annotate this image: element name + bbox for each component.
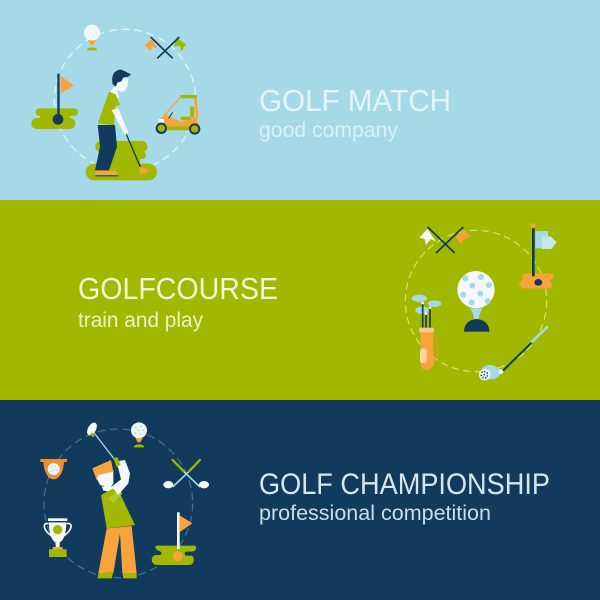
heading: golfcourse: GOLFCOURSE (78, 272, 278, 306)
figure: golfer putting (95, 70, 149, 176)
icon: golf club and ball (479, 326, 548, 380)
panel: golf championship (0, 400, 600, 600)
dashed circle (405, 230, 547, 372)
figure: golfer swinging (85, 421, 137, 578)
illustration: golf match icons (31, 25, 199, 180)
panel: golf match (0, 0, 600, 200)
icon: flag and hole (31, 74, 78, 129)
grass patch (86, 141, 157, 180)
subheading: good company: good company (259, 118, 398, 142)
icon: trophy (44, 518, 71, 557)
icon: golf cart (157, 95, 199, 134)
icon: crossed flags (144, 37, 186, 58)
icon: flag and hole (519, 223, 557, 288)
heading: golf championship: GOLF CHAMPIONSHIP (259, 468, 550, 501)
dashed circle (54, 29, 196, 171)
panel: golfcourse (0, 200, 600, 400)
icon: golf ball on tee (84, 25, 100, 50)
icon: golf bag with clubs (412, 295, 441, 370)
icon: crossed flags (419, 227, 472, 253)
subheading: train and play: train and play (78, 308, 203, 332)
icon: golf ball on tee (131, 422, 147, 447)
icon: ball badge (40, 459, 67, 479)
dashed circle (44, 429, 193, 578)
icon: crossed clubs (163, 459, 209, 488)
heading: golf match: GOLF MATCH (259, 84, 451, 118)
icon: golf ball on tee (457, 271, 495, 332)
icon: flag and hole (152, 512, 196, 565)
subheading: professional competition: professional competition (259, 502, 491, 525)
illustration: golf championship icons (40, 421, 209, 578)
illustration: golfcourse icons (405, 223, 557, 380)
